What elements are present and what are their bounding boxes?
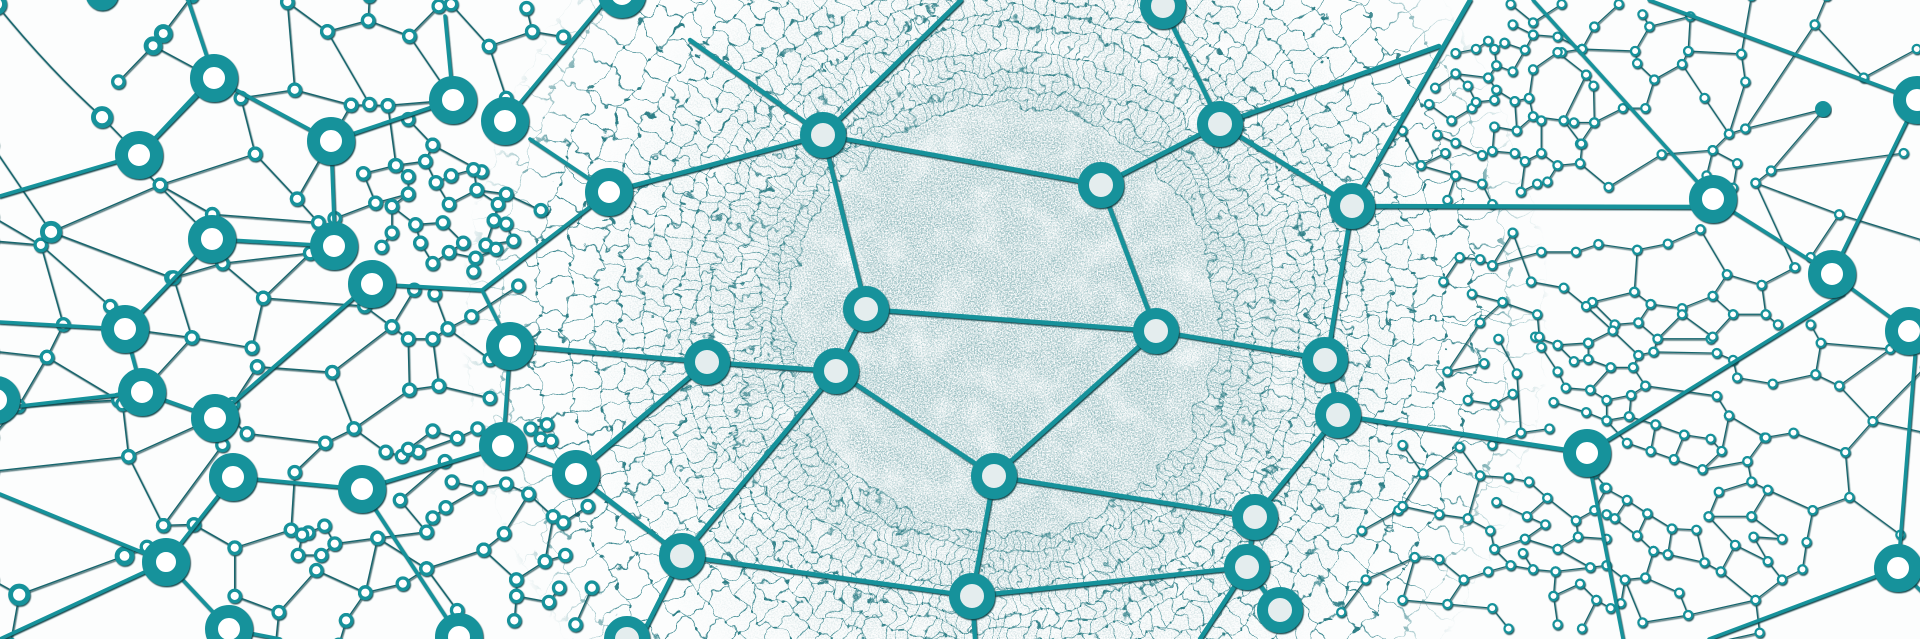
centre rings xyxy=(610,0,1370,639)
right rings xyxy=(1570,82,1920,586)
right thin mesh with small nodes xyxy=(1341,0,1920,639)
left thin mesh with small nodes xyxy=(0,0,592,639)
left extra medium rings xyxy=(11,27,170,603)
mottled grain texture xyxy=(595,0,1428,639)
left rings xyxy=(0,0,640,639)
right solid dot node xyxy=(1815,101,1831,117)
left heavy ring xyxy=(149,545,183,579)
left medium nodes xyxy=(0,4,139,155)
uniform centre grain xyxy=(742,56,1278,588)
radial fine mesh around the centre xyxy=(465,0,1545,639)
